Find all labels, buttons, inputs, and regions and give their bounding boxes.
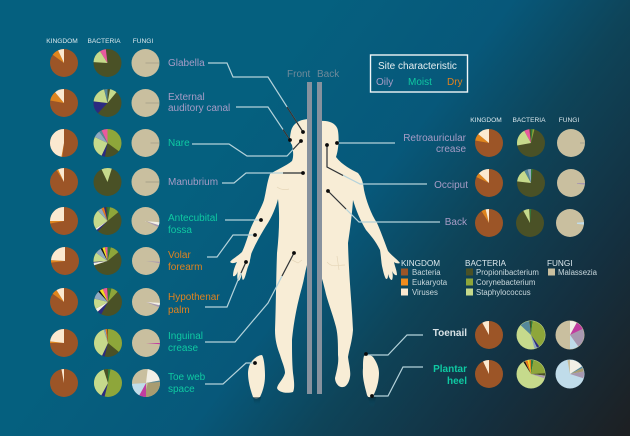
pies: glabella	[50, 49, 160, 77]
key: kingdom bacteria fungi: Viruses	[412, 288, 438, 297]
shadows below feet	[253, 397, 376, 407]
key: kingdom bacteria fungi: BACTERIA	[465, 259, 506, 268]
site characteristic legend	[370, 55, 468, 92]
site characteristic legend: Dry	[447, 77, 463, 88]
left site labels: External	[168, 92, 205, 103]
left column headers: FUNGI	[133, 38, 153, 45]
right column headers: KINGDOM	[470, 117, 502, 124]
pies: retroauricular crease	[475, 129, 585, 157]
left site labels: Hypothenar	[168, 292, 220, 303]
right foot sole	[363, 355, 379, 397]
right column headers: FUNGI	[559, 117, 579, 124]
left column headers	[46, 38, 153, 45]
pies: toe web space	[50, 369, 160, 397]
key: kingdom bacteria fungi: Malassezia	[558, 268, 598, 277]
left site labels: palm	[168, 305, 190, 316]
pies: volar forearm	[51, 247, 160, 275]
pie charts: right sites	[475, 129, 585, 388]
pies: hypothenar palm	[50, 288, 160, 316]
left site labels: Manubrium	[168, 177, 218, 188]
left column headers: BACTERIA	[88, 38, 121, 45]
key: kingdom bacteria fungi: Corynebacterium	[476, 278, 535, 287]
right site labels: crease	[436, 144, 466, 155]
site characteristic legend: Oily	[376, 77, 393, 88]
pies: plantar heel	[475, 360, 584, 388]
right site labels: Back	[445, 217, 468, 228]
key: kingdom bacteria fungi	[401, 259, 598, 297]
left site labels: fossa	[168, 225, 192, 236]
left foot sole	[248, 355, 265, 398]
pies: manubrium	[50, 168, 160, 196]
left site labels: Inguinal	[168, 331, 203, 342]
site characteristic legend: Moist	[408, 77, 432, 88]
back label: Back	[317, 69, 340, 80]
left column headers: KINGDOM	[46, 38, 78, 45]
right site labels: Toenail	[433, 328, 467, 339]
pies: back	[475, 209, 584, 237]
right column headers	[470, 117, 579, 124]
left site labels: Toe web	[168, 372, 206, 383]
right site labels	[403, 133, 468, 387]
right site labels: heel	[447, 376, 467, 387]
back body half	[320, 121, 400, 387]
key: kingdom bacteria fungi: Propionibacterium	[476, 268, 539, 277]
site characteristic legend: Site characteristic	[378, 61, 457, 72]
pies: nare	[50, 129, 160, 157]
pie charts: left sites	[50, 49, 160, 397]
right column headers: BACTERIA	[513, 117, 546, 124]
left site labels: space	[168, 384, 195, 395]
left site labels	[168, 58, 230, 395]
right site labels: Retroauricular	[403, 133, 467, 144]
pies: toenail	[475, 320, 584, 350]
left site labels: Volar	[168, 250, 191, 261]
key: kingdom bacteria fungi: FUNGI	[547, 259, 572, 268]
pies: occiput	[475, 169, 585, 197]
left site labels: Nare	[168, 138, 190, 149]
right site labels: Plantar	[433, 364, 467, 375]
left site labels: Glabella	[168, 58, 205, 69]
body figure	[230, 119, 400, 407]
left site labels: crease	[168, 343, 198, 354]
pies: external auditory canal	[50, 89, 160, 117]
pies: antecubital fossa	[50, 207, 160, 235]
front/back divider poles	[307, 82, 322, 394]
front body half	[230, 119, 310, 393]
front label: Front	[287, 69, 311, 80]
left site labels: forearm	[168, 262, 202, 273]
right site labels: Occiput	[434, 180, 468, 191]
left site labels: auditory canal	[168, 103, 230, 114]
pies: inguinal crease	[50, 329, 160, 357]
key: kingdom bacteria fungi: KINGDOM	[401, 259, 440, 268]
site markers	[244, 130, 374, 398]
key: kingdom bacteria fungi: Staphylococcus	[476, 288, 531, 297]
left site labels: Antecubital	[168, 213, 217, 224]
key: kingdom bacteria fungi: Eukaryota	[412, 278, 448, 287]
connector lines	[192, 63, 440, 396]
key: kingdom bacteria fungi: Bacteria	[412, 268, 441, 277]
